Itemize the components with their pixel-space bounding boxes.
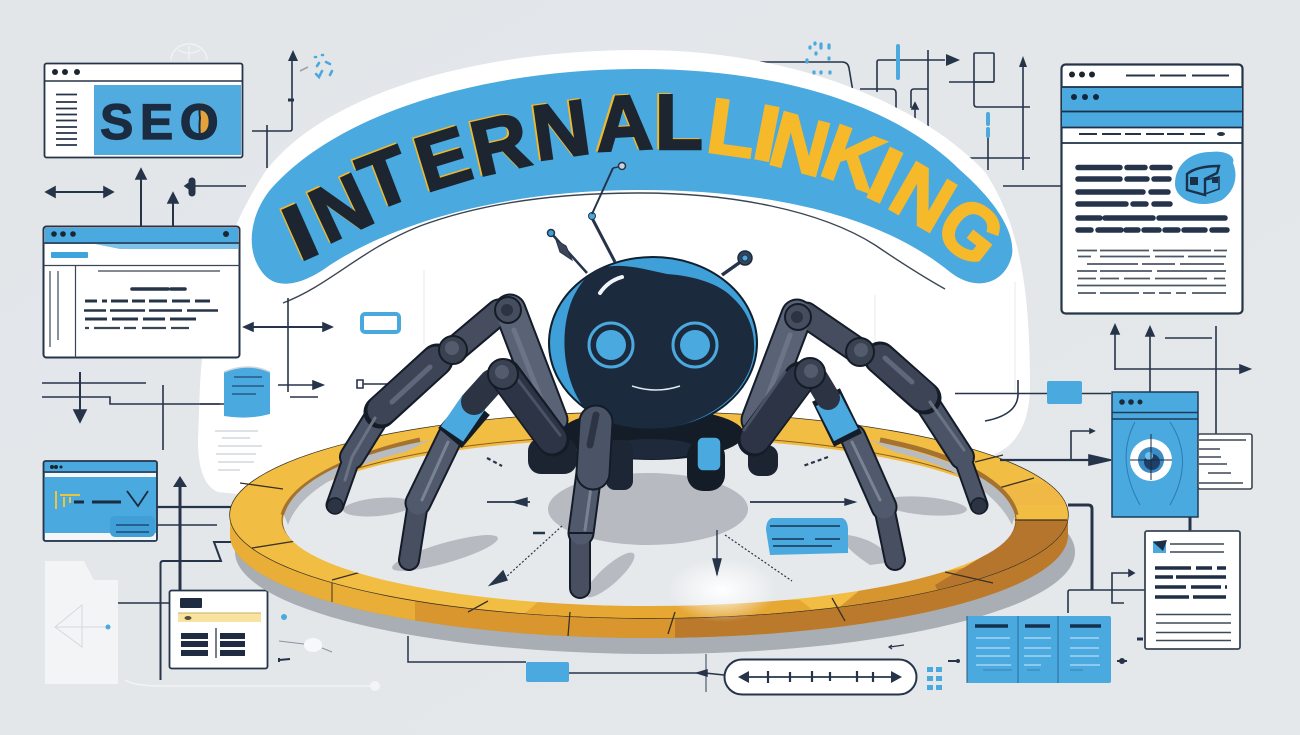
connector lines: lower left [118, 476, 232, 680]
title: LINKING [702, 81, 1020, 284]
left outer leg [335, 360, 437, 505]
panel: browser window left [44, 226, 240, 358]
title: INTERNAL: N [297, 156, 385, 260]
white arch backdrop [198, 50, 1030, 500]
left pods [528, 438, 577, 474]
panel: small blue window left [44, 461, 157, 541]
arc line under banner [283, 193, 945, 303]
decorative blue marks top right [807, 43, 988, 136]
right inner leg [744, 372, 895, 560]
panel: white note [1198, 434, 1252, 489]
icon: book badge [1175, 152, 1235, 204]
title: INTERNAL: E [405, 109, 481, 209]
right pod with blue block [687, 440, 725, 491]
connector lines: top right [760, 50, 1061, 186]
golden ring platform [229, 412, 1069, 638]
spider robot [327, 162, 987, 588]
title: LINKING: G [921, 180, 1020, 284]
icon: small blue grid [927, 667, 942, 690]
title: INTERNAL: L [655, 78, 703, 166]
back upper leg segments [454, 310, 860, 420]
icon: blue document [224, 367, 270, 418]
panel: small table card [170, 590, 268, 668]
center pod [606, 440, 633, 490]
inner lip [283, 440, 420, 515]
title banner [252, 69, 1020, 284]
left inner leg [409, 372, 560, 560]
antennae [548, 162, 752, 275]
title: LINKING: I [856, 131, 914, 220]
title: INTERNAL: R [463, 95, 537, 193]
title: LINKING: K [811, 107, 895, 209]
panel: SEO browser window [44, 64, 243, 158]
right outer pod [748, 445, 778, 476]
faint white doc lines [215, 431, 262, 470]
panel: right document window [1062, 64, 1242, 314]
connector lines: bottom center [408, 636, 904, 692]
robot feet knuckles [327, 498, 987, 514]
title: LINKING: N [761, 94, 839, 194]
title: LINKING: N [877, 145, 969, 249]
floor arrows [487, 457, 855, 585]
floor glow [667, 558, 777, 622]
small marks beside table [948, 658, 1127, 664]
title: LINKING: L [702, 81, 762, 175]
right outer leg [880, 358, 979, 505]
connector lines: right side [955, 325, 1250, 639]
title: INTERNAL: N [527, 83, 595, 177]
title: INTERNAL [271, 78, 703, 278]
panel: lower right document [1145, 531, 1240, 649]
center front leg [570, 415, 596, 588]
pill double arrow [724, 660, 916, 694]
icon: blue outline tag [362, 314, 399, 332]
panel: blue three column table [967, 616, 1111, 683]
connector lines: mid left [42, 298, 396, 450]
title: INTERNAL: A [594, 78, 654, 168]
connector lines: top left [46, 50, 308, 226]
faint guide lines in backdrop [424, 270, 1015, 392]
blue connector box [526, 662, 569, 682]
decorative blue dots top left [315, 55, 332, 77]
faint globe icon [171, 44, 207, 60]
ring shadow [235, 450, 1075, 654]
head [549, 257, 757, 429]
connector: small blue box [1047, 381, 1082, 404]
title: INTERNAL: I [271, 188, 330, 278]
leg and body shadows on floor [342, 473, 968, 603]
floor blue note [766, 518, 848, 555]
title: INTERNAL: T [347, 128, 423, 228]
undercarriage [560, 408, 744, 460]
title: LINKING: I [747, 89, 787, 179]
ring segment joints [240, 455, 1067, 636]
icon: target eye [1130, 434, 1172, 481]
small marks lower left [125, 614, 380, 691]
panel: blue target window [1112, 392, 1198, 517]
ring floor [283, 438, 1015, 606]
SEO label: SEO [100, 94, 225, 150]
panel: faint page [45, 561, 118, 684]
